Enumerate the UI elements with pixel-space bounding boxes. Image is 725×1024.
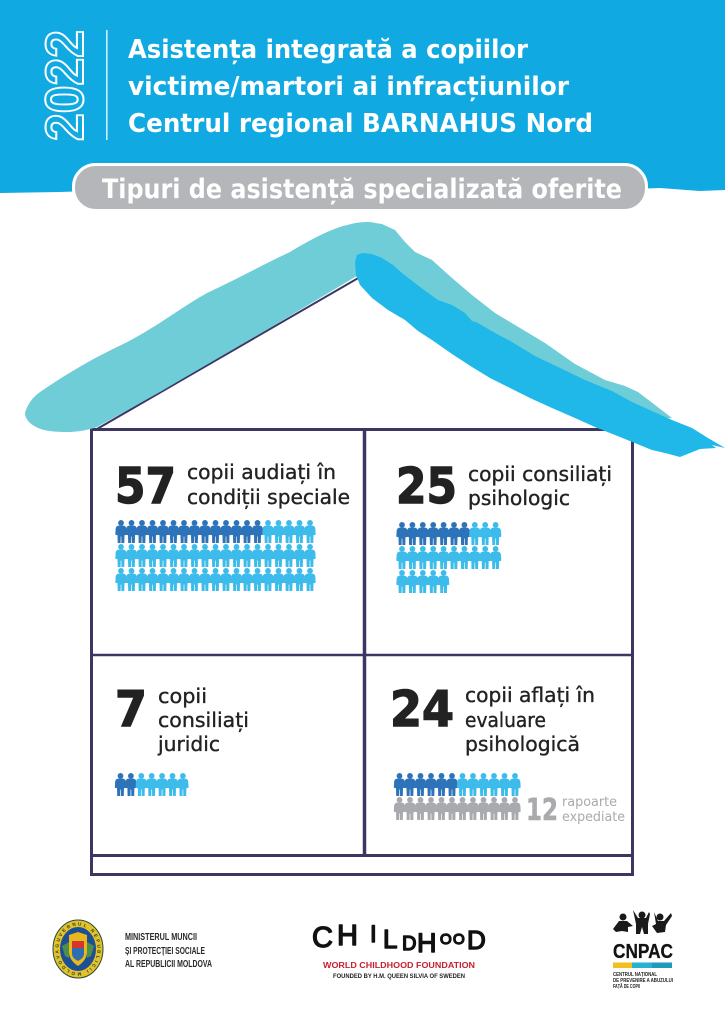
- logo: Childhood: WORLD CHILDHOOD FOUNDATION: [323, 960, 475, 970]
- emblem: GUVERNUL REPUBLICII MOLDOVA: [55, 922, 101, 976]
- subtitle pill: [74, 164, 646, 210]
- logo: Childhood: [312, 920, 486, 980]
- panel: 24 copii aflați în evaluare psihologică: 24: [390, 681, 454, 738]
- panel: 57 copii audiați: 57: [115, 458, 176, 515]
- pictogram: 7 children: [115, 773, 189, 796]
- logo: Ministerul Muncii: MINISTERUL MUNCII: [125, 932, 197, 943]
- logo: Childhood: H: [417, 928, 436, 958]
- panel: 7 copii consiliați juridic: copii: [158, 684, 207, 708]
- panel: 24 copii aflați în evaluare psihologică: evaluare: [465, 708, 546, 732]
- pictogram: 24 children: [394, 773, 521, 820]
- logo: CNPAC: CENTRUL NAȚIONAL: [613, 972, 658, 978]
- panel: 24 copii aflați în evaluare psihologică: psihologică: [465, 732, 580, 756]
- house frame: [92, 277, 632, 874]
- logo: Childhood: D: [402, 933, 416, 955]
- logo: CNPAC: DE PREVENIRE A ABUZULUI: [613, 978, 673, 984]
- panel: 7 copii consiliați juridic: juridic: [157, 732, 220, 756]
- logo: Childhood: O: [453, 931, 465, 948]
- logo: Childhood: C: [312, 922, 333, 954]
- year 2022: 2022: [35, 30, 95, 141]
- callout: 12 rapoarte expediate: [526, 793, 625, 828]
- title: victime/martori ai infracțiunilor: [128, 72, 569, 102]
- logo: Childhood: L: [383, 924, 397, 954]
- panel: 24 copii aflați în evaluare psihologică: [390, 681, 625, 828]
- panel: 24 copii aflați în evaluare psihologică: copii aflați în: [465, 683, 595, 707]
- children silhouettes: [613, 910, 672, 934]
- title: Centrul regional BARNAHUS Nord: [128, 109, 593, 139]
- panel: 57 copii audiați: copii audiați în: [187, 460, 336, 484]
- roof: right slope: [355, 222, 725, 457]
- panel: 7 copii consiliați juridic: 7: [115, 681, 147, 738]
- logo: Ministerul Muncii: AL REPUBLICII MOLDOVA: [125, 959, 212, 970]
- logo: Childhood: D: [467, 925, 486, 955]
- logo: Childhood: H: [337, 920, 358, 952]
- logo: Ministerul Muncii: ȘI PROTECȚIEI SOCIALE: [125, 946, 205, 957]
- panel: 7 copii consiliați juridic: [115, 681, 249, 796]
- title: [128, 35, 593, 139]
- roof: left slope: [25, 222, 400, 432]
- header band: [0, 0, 725, 193]
- callout: 12 rapoarte expediate: rapoarte: [562, 795, 617, 810]
- roof main: [355, 253, 725, 457]
- header divider: [106, 30, 108, 140]
- panel: 57 copii audiați: [115, 458, 350, 591]
- logo: CNPAC: [613, 910, 673, 990]
- panel: 25 copii consiliați psihologic: psihologic: [468, 486, 570, 510]
- title: Asistența integrată a copiilor: [128, 35, 528, 65]
- pictogram: 57 children: [115, 520, 316, 591]
- logo: CNPAC: FAȚĂ DE COPII: [613, 983, 640, 990]
- logo: CNPAC: CNPAC: [613, 940, 673, 963]
- pictogram: 25 children: [396, 522, 501, 593]
- callout: 12 rapoarte expediate: 12: [526, 793, 558, 828]
- logo: Ministerul Muncii: [52, 920, 212, 978]
- logo: Childhood: FOUNDED BY H.M. QUEEN SILVIA OF SWEDEN: [333, 974, 465, 980]
- panel: 25 copii consiliați psihologic: [396, 458, 612, 593]
- panel: 25 copii consiliați psihologic: copii consiliați: [468, 462, 612, 486]
- panel: 7 copii consiliați juridic: consiliați: [158, 708, 249, 732]
- panel: 25 copii consiliați psihologic: 25: [396, 458, 457, 515]
- roof shade: [367, 222, 672, 420]
- logo: Childhood: O: [440, 931, 452, 948]
- logo: Childhood: I: [370, 921, 377, 948]
- subtitle pill: Tipuri de asistență specializată oferite: [102, 174, 622, 205]
- callout: 12 rapoarte expediate: expediate: [562, 810, 625, 825]
- panel: 57 copii audiați: condiții speciale: [187, 485, 350, 509]
